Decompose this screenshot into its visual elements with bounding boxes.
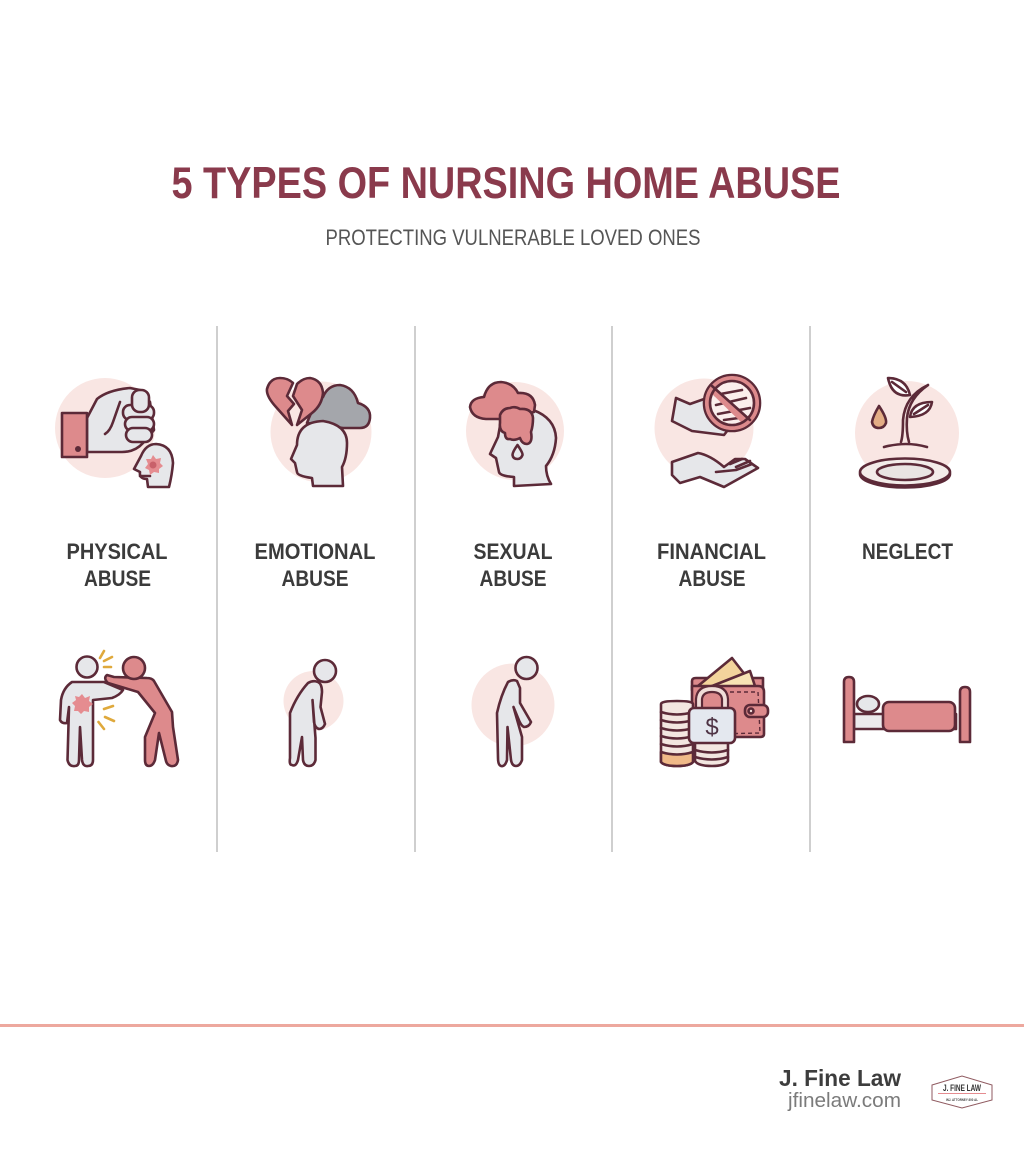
label: abuse: ABUSE bbox=[480, 566, 546, 591]
label: abuse: ABUSE bbox=[678, 566, 746, 591]
brand name: J. Fine Law bbox=[779, 1065, 902, 1091]
subtitle: PROTECTING VULNERABLE LOVED ONES bbox=[326, 225, 700, 250]
label: sexual abuse: SEXUAL bbox=[474, 539, 552, 564]
figure: stooped person with circle bbox=[472, 657, 554, 766]
panel: neglect bbox=[844, 378, 970, 742]
figure: stooped person bbox=[284, 660, 344, 766]
label: neglect: NEGLECT bbox=[862, 539, 953, 564]
panel: financial abuse bbox=[654, 375, 768, 766]
label: abuse: ABUSE bbox=[84, 566, 151, 591]
figure: empty bed bbox=[844, 677, 970, 742]
footer rule bbox=[0, 1024, 1024, 1027]
panel: emotional abuse bbox=[254, 378, 376, 766]
label: abuse: ABUSE bbox=[282, 566, 348, 591]
brand url: jfinelaw.com bbox=[787, 1090, 901, 1112]
figure: wallet, coins and padlock: $ bbox=[705, 714, 719, 741]
icon: broken heart, cloud and head bbox=[267, 378, 372, 486]
title: 5 TYPES OF NURSING HOME ABUSE bbox=[172, 159, 840, 208]
logo badge: INJ. ATTORNEY 800 AL bbox=[946, 1097, 978, 1102]
label: emotional abuse: EMOTIONAL bbox=[254, 539, 376, 564]
icon: hands with prohibition sign bbox=[654, 375, 760, 487]
panel: physical abuse bbox=[55, 378, 178, 766]
icon: fist striking head bbox=[55, 378, 173, 487]
icon: head with dark cloud and tear bbox=[466, 382, 564, 486]
panel: sexual abuse bbox=[466, 382, 564, 766]
logo badge: J. FINE LAW bbox=[943, 1083, 981, 1093]
label: financial abuse: FINANCIAL bbox=[657, 539, 766, 564]
figure: wallet, coins and padlock bbox=[661, 658, 768, 766]
figure: two people in altercation bbox=[60, 651, 178, 766]
logo badge bbox=[932, 1076, 992, 1108]
icon: plant, water drop and empty plate bbox=[855, 378, 959, 488]
label: physical abuse: PHYSICAL bbox=[66, 539, 168, 564]
